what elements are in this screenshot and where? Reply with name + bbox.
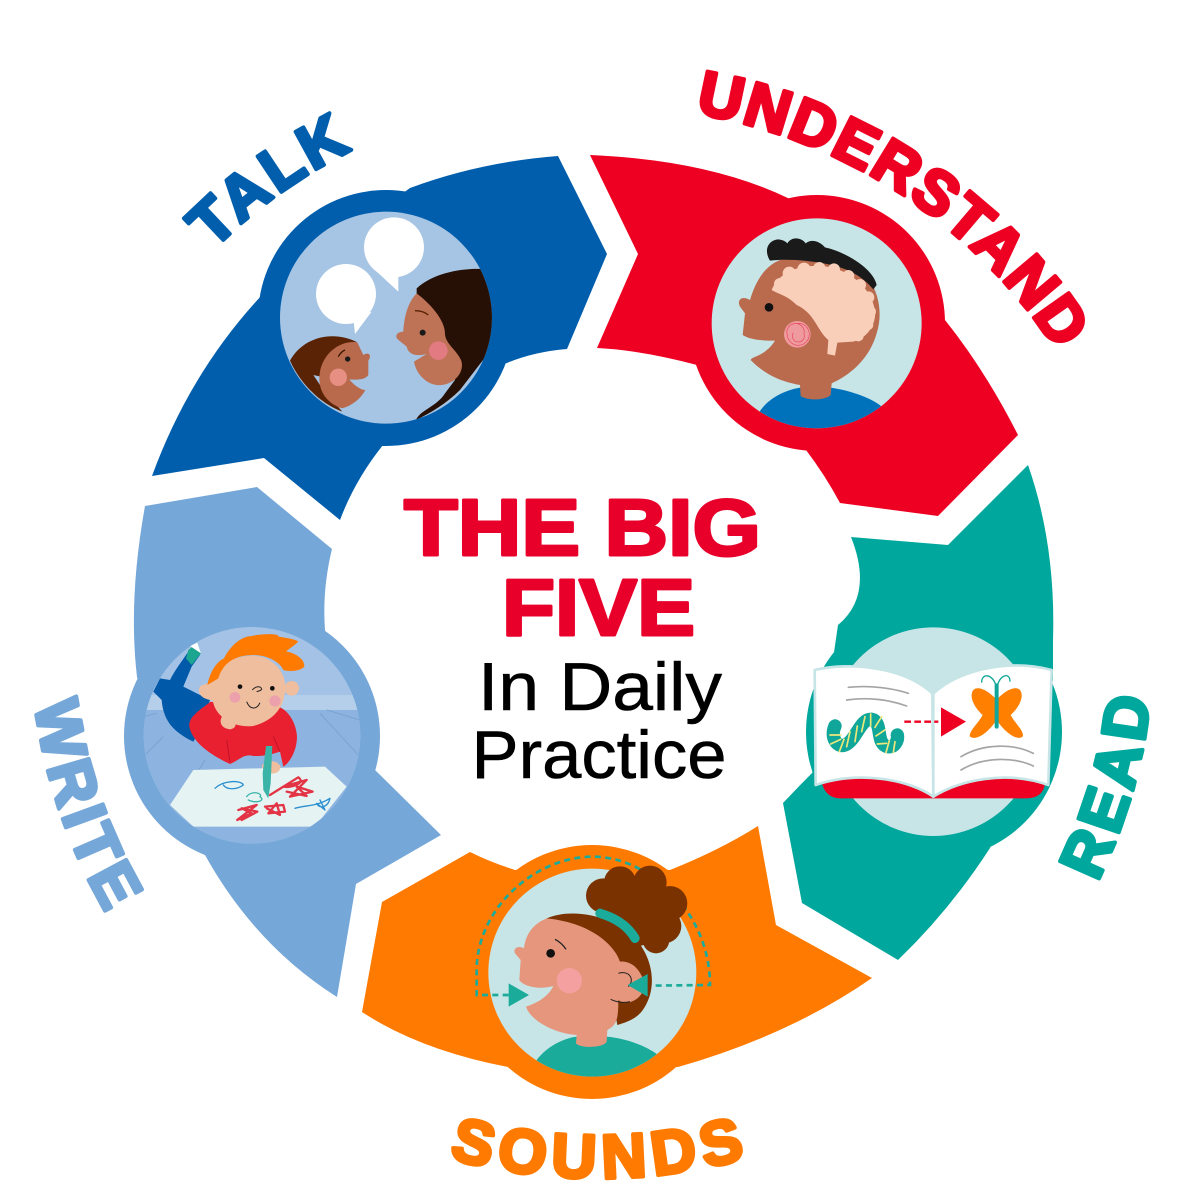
label: sounds: SOUNDS: [451, 1118, 743, 1180]
icon: child drawing on paper: [140, 627, 367, 850]
icon: mother and child talking: [280, 212, 500, 424]
label: write: WRITE: [34, 694, 144, 913]
title: FIVE: [502, 563, 695, 652]
panel: talk segment: [152, 156, 607, 520]
label: talk: TALK: [182, 111, 354, 242]
label: read: READ: [1058, 696, 1150, 880]
title: Practice: [472, 717, 726, 793]
label: understand: UNDERSTAND: [700, 70, 1085, 343]
icon: child hearing own voice: [477, 857, 710, 1083]
panel: read segment: [783, 465, 1062, 960]
panel: write segment: [124, 487, 441, 997]
panel: sounds segment: [362, 826, 872, 1099]
panel: understand segment: [590, 155, 1018, 516]
title: [404, 483, 761, 793]
title: THE BIG: [404, 483, 761, 572]
icon: child profile with brain: [712, 218, 922, 443]
icon: open book with caterpillar and butterfly: [815, 627, 1052, 836]
title: In Daily: [478, 649, 722, 725]
